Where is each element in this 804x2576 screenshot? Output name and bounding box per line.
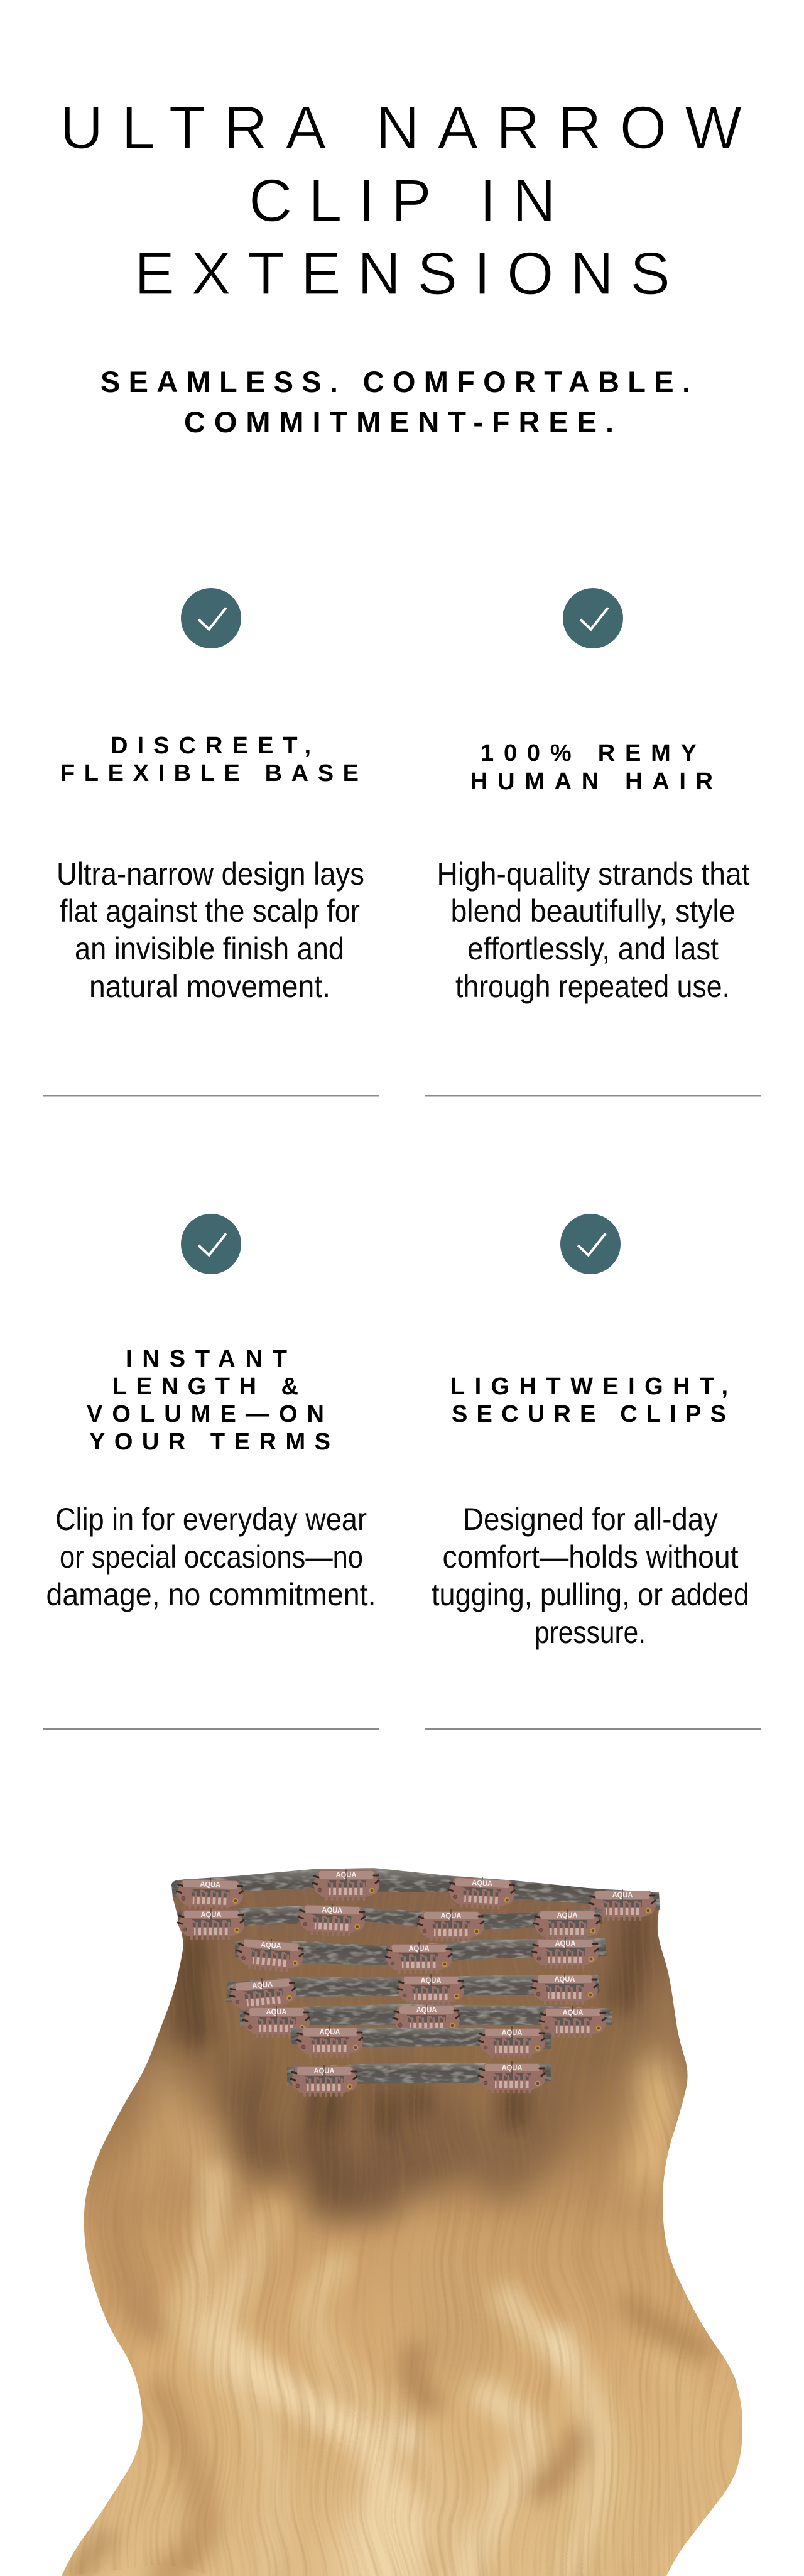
illustration: hair extension with clips: [62, 1868, 742, 2576]
weft 1 with clips: AQUA: [335, 1872, 357, 1879]
title: ULTRA NARROW: [60, 94, 742, 161]
heading: lightweight secure clips: [450, 1373, 728, 1427]
heading: instant length and volume: INSTANT: [126, 1346, 287, 1372]
text block: discreet flexible base: [57, 856, 364, 1004]
heading: instant length and volume: VOLUME—ON: [87, 1401, 324, 1427]
text block: remy human hair: through repeated use.: [455, 969, 730, 1004]
icon: check badge: [181, 1214, 241, 1274]
heading: remy human hair: [470, 740, 713, 795]
weft 4 with clips: [226, 1973, 600, 2013]
text block: remy human hair: effortlessly, and last: [467, 931, 719, 966]
heading: lightweight secure clips: LIGHTWEIGHT,: [450, 1373, 728, 1400]
subtitle: [100, 365, 690, 439]
text block: instant length and volume: [46, 1502, 376, 1612]
weft 3 with clips: AQUA: [408, 1945, 430, 1953]
panel: remy human hair: [437, 588, 750, 1004]
text block: lightweight secure clips: Designed for all-day: [463, 1502, 718, 1537]
weft 3 with clips: AQUA: [555, 1940, 575, 1948]
weft 7 with clips: [287, 2061, 551, 2097]
weft 5 with clips: [240, 2004, 612, 2038]
hair body: [62, 1888, 742, 2576]
weft 7 with clips: AQUA: [501, 2065, 523, 2072]
weft 5 with clips: AQUA: [563, 2009, 583, 2017]
icon: check badge: [181, 588, 241, 648]
heading: discreet flexible base: FLEXIBLE BASE: [60, 760, 359, 787]
weft 3 with clips: AQUA: [260, 1941, 281, 1950]
heading: discreet flexible base: DISCREET,: [111, 733, 311, 759]
weft 1 with clips: AQUA: [612, 1892, 633, 1899]
weft 1 with clips: AQUA: [472, 1879, 492, 1888]
weft 3 with clips: [235, 1936, 607, 1974]
text block: discreet flexible base: natural movement.: [89, 969, 330, 1004]
heading: instant length and volume: YOUR TERMS: [89, 1429, 330, 1455]
text block: instant length and volume: or special occasions—no: [60, 1539, 363, 1575]
text block: remy human hair: High-quality strands that: [437, 856, 750, 892]
text block: lightweight secure clips: pressure.: [535, 1615, 646, 1650]
title: [60, 94, 742, 307]
panel: discreet flexible base: [57, 588, 364, 1004]
weft 6 with clips: [290, 2026, 551, 2058]
weft 6 with clips: AQUA: [319, 2029, 340, 2036]
text block: discreet flexible base: an invisible finish and: [75, 931, 344, 966]
text block: discreet flexible base: Ultra-narrow design lays: [57, 856, 364, 892]
text block: lightweight secure clips: comfort—holds without: [442, 1539, 739, 1575]
heading: discreet flexible base: [60, 733, 359, 787]
title: CLIP IN: [249, 167, 556, 234]
weft 2 with clips: [178, 1902, 602, 1941]
icon: check badge: [560, 1214, 621, 1274]
text block: instant length and volume: damage, no commitment.: [46, 1577, 376, 1612]
weft 5 with clips: AQUA: [416, 2007, 437, 2014]
weft 2 with clips: AQUA: [441, 1913, 461, 1920]
panel: lightweight secure clips: [432, 1214, 749, 1650]
title: EXTENSIONS: [134, 240, 670, 307]
subtitle: SEAMLESS. COMFORTABLE.: [100, 365, 690, 398]
weft 4 with clips: AQUA: [421, 1977, 441, 1985]
heading: remy human hair: HUMAN HAIR: [470, 768, 713, 795]
text block: remy human hair: blend beautifully, style: [451, 893, 735, 929]
weft 2 with clips: AQUA: [322, 1906, 342, 1915]
heading: lightweight secure clips: SECURE CLIPS: [452, 1401, 726, 1427]
weft 1 with clips: AQUA: [200, 1880, 220, 1889]
heading: instant length and volume: LENGTH &: [112, 1373, 298, 1400]
panel: instant length and volume: [46, 1214, 376, 1612]
text block: remy human hair: [437, 856, 750, 1004]
subtitle: COMMITMENT-FREE.: [184, 405, 614, 439]
heading: instant length and volume: [87, 1346, 330, 1455]
weft 6 with clips: AQUA: [501, 2029, 523, 2037]
icon: check badge: [563, 588, 623, 648]
text block: lightweight secure clips: tugging, pulling, or added: [432, 1577, 749, 1612]
weft 7 with clips: AQUA: [314, 2068, 334, 2075]
text block: instant length and volume: Clip in for everyday wear: [55, 1502, 367, 1537]
weft 2 with clips: AQUA: [557, 1912, 578, 1919]
weft 5 with clips: AQUA: [266, 2009, 286, 2016]
weft 4 with clips: AQUA: [252, 1981, 273, 1990]
heading: remy human hair: 100% REMY: [481, 740, 697, 767]
weft 4 with clips: AQUA: [554, 1976, 575, 1984]
weft 1 with clips: [171, 1868, 660, 1921]
text block: discreet flexible base: flat against the scalp for: [60, 893, 360, 929]
text block: lightweight secure clips: [432, 1502, 749, 1650]
weft 2 with clips: AQUA: [201, 1911, 221, 1919]
